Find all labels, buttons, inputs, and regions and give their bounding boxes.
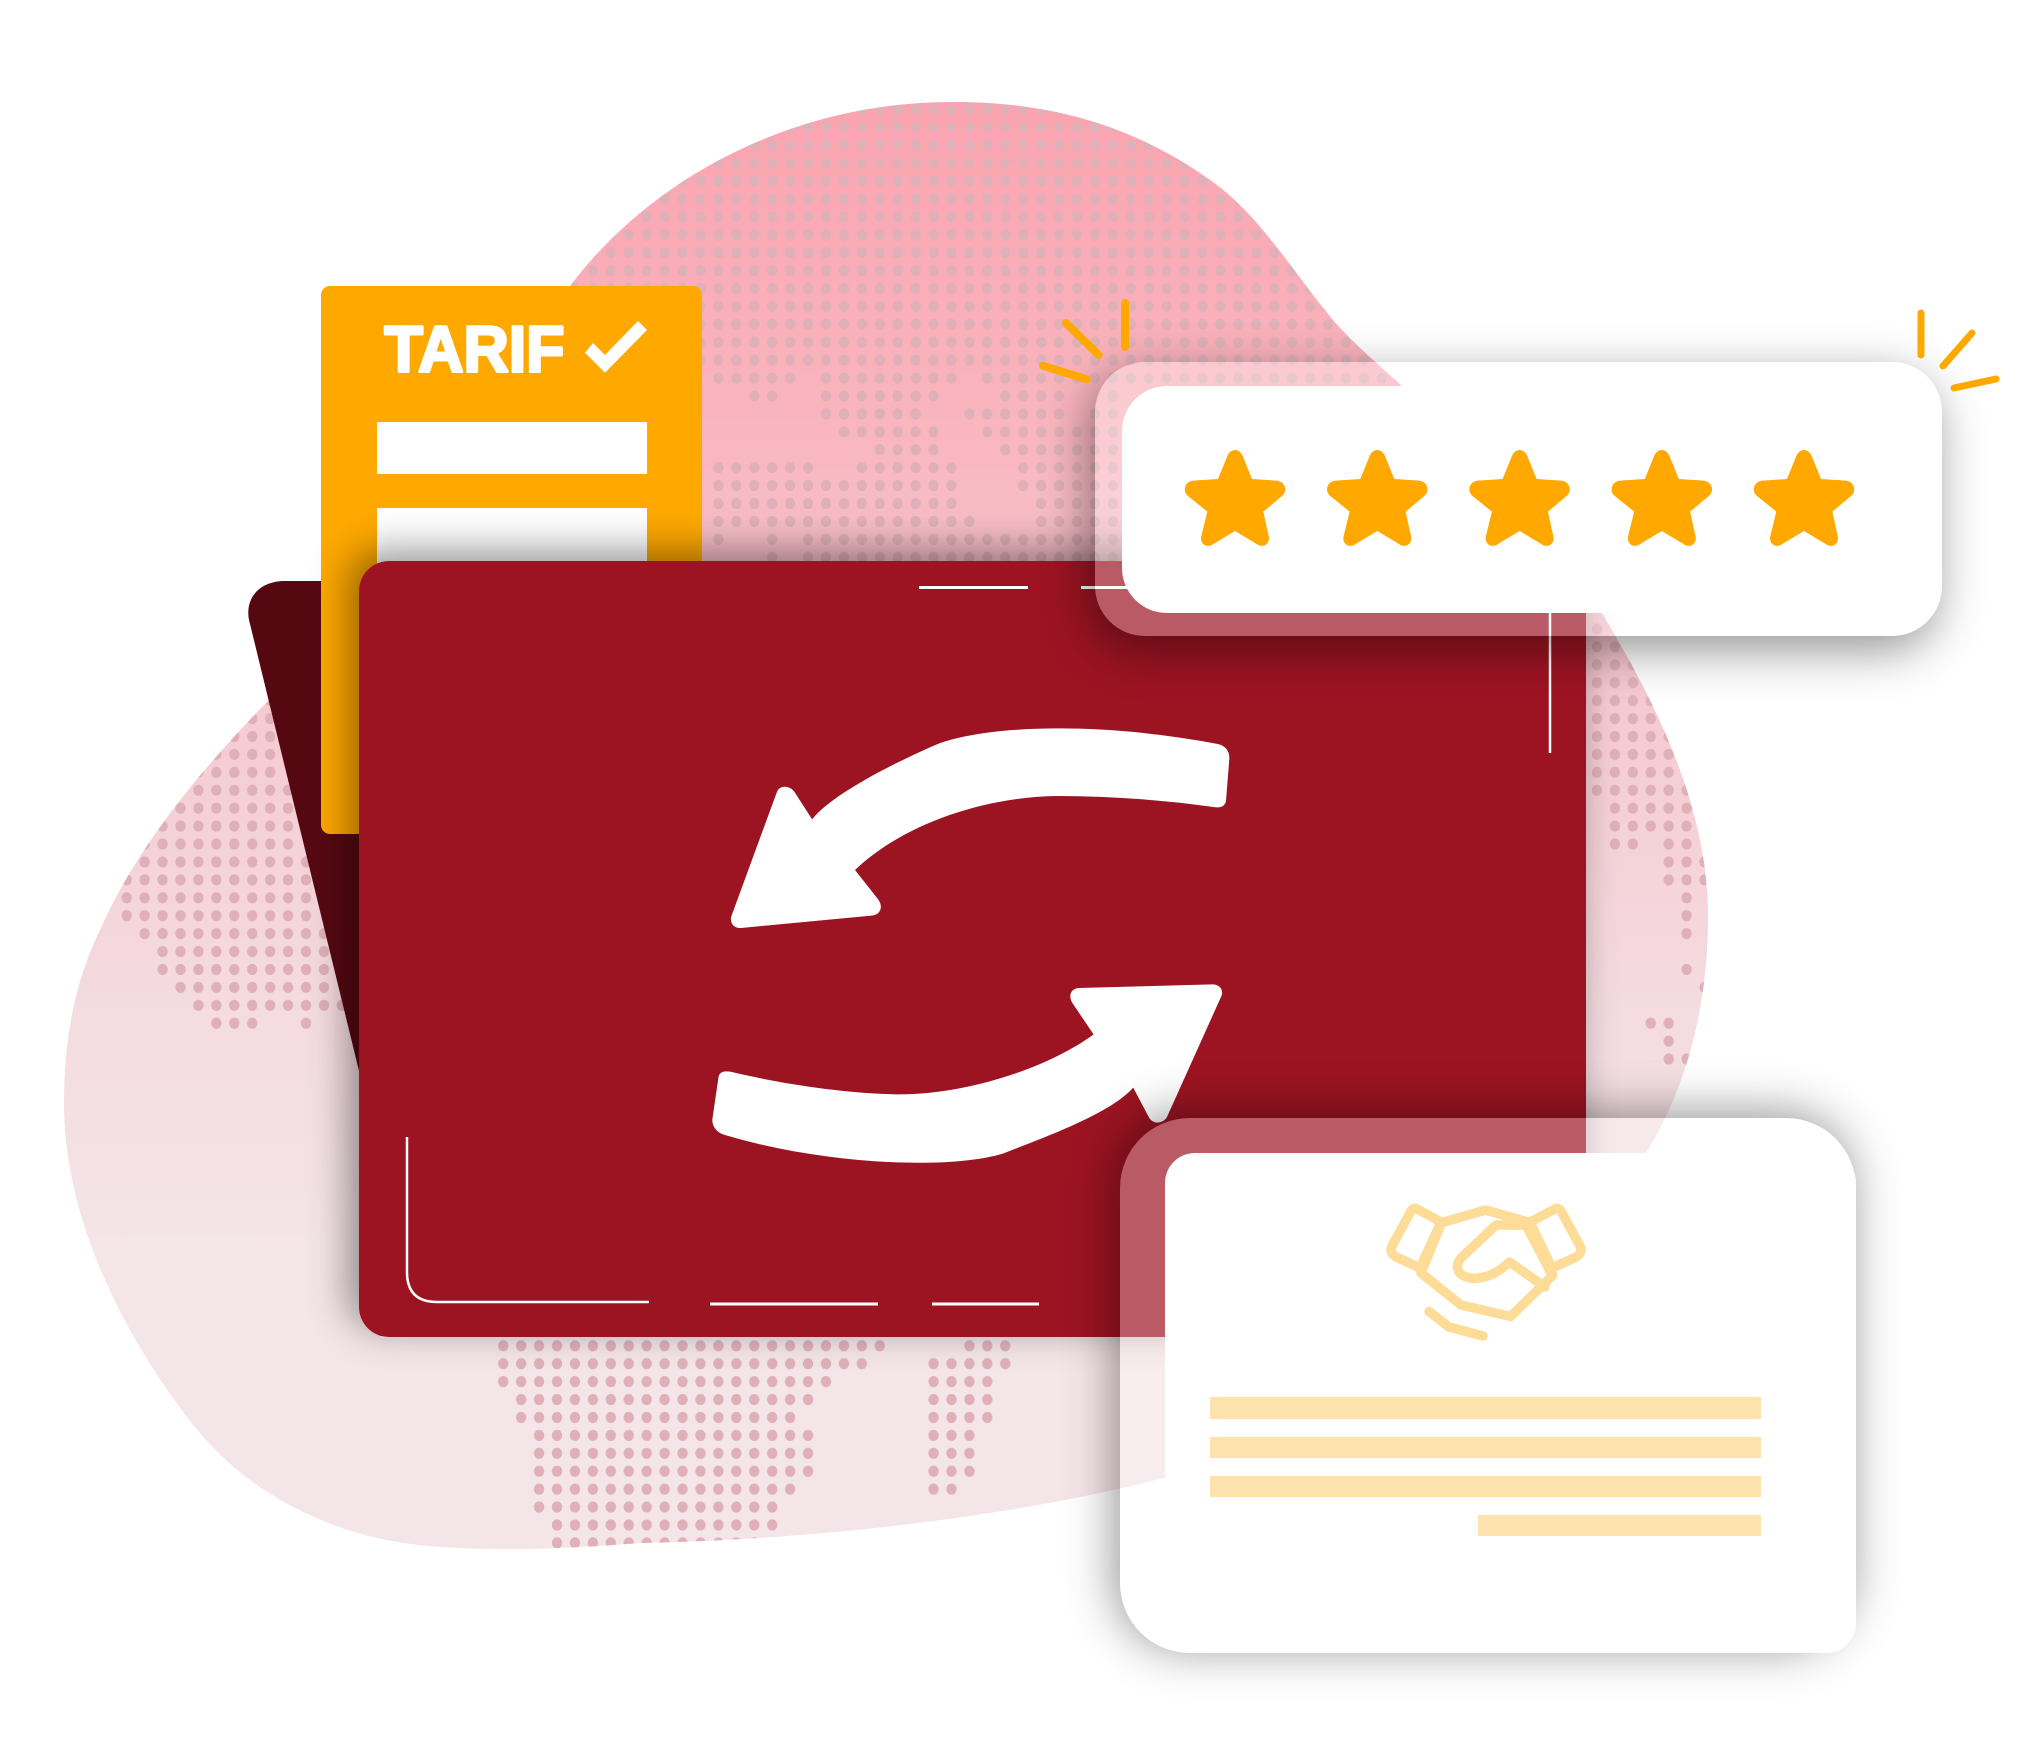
sheet line 2 <box>377 508 647 578</box>
sheet line 1 <box>377 422 647 474</box>
sparkle right of rating card <box>1921 313 1996 388</box>
dotted world map <box>118 100 1714 1552</box>
rating card <box>1095 362 1942 636</box>
agreement card shadow <box>1120 1118 1856 1653</box>
icon: handshake <box>1391 1208 1581 1336</box>
dark back folder <box>248 581 420 1080</box>
text line 4 <box>1478 1515 1761 1536</box>
text line 3 <box>1210 1476 1761 1497</box>
text line 2 <box>1210 1437 1761 1458</box>
orange tariff sheet <box>321 286 702 834</box>
icon: check mark <box>585 321 647 373</box>
panel frame lines <box>407 588 1550 1304</box>
text line 1 <box>1210 1397 1761 1419</box>
arrow: bottom going right <box>712 984 1222 1163</box>
rating card shadow <box>1095 362 1942 636</box>
arrow: top returning left <box>731 728 1229 928</box>
five stars <box>1185 450 1854 546</box>
pink background blob <box>64 102 1708 1549</box>
main red panel <box>359 561 1586 1337</box>
tariff title: TARIF <box>384 312 564 386</box>
agreement card <box>1120 1118 1856 1653</box>
sparkle left of rating card <box>1043 303 1125 379</box>
main panel shadow <box>359 561 1586 1337</box>
